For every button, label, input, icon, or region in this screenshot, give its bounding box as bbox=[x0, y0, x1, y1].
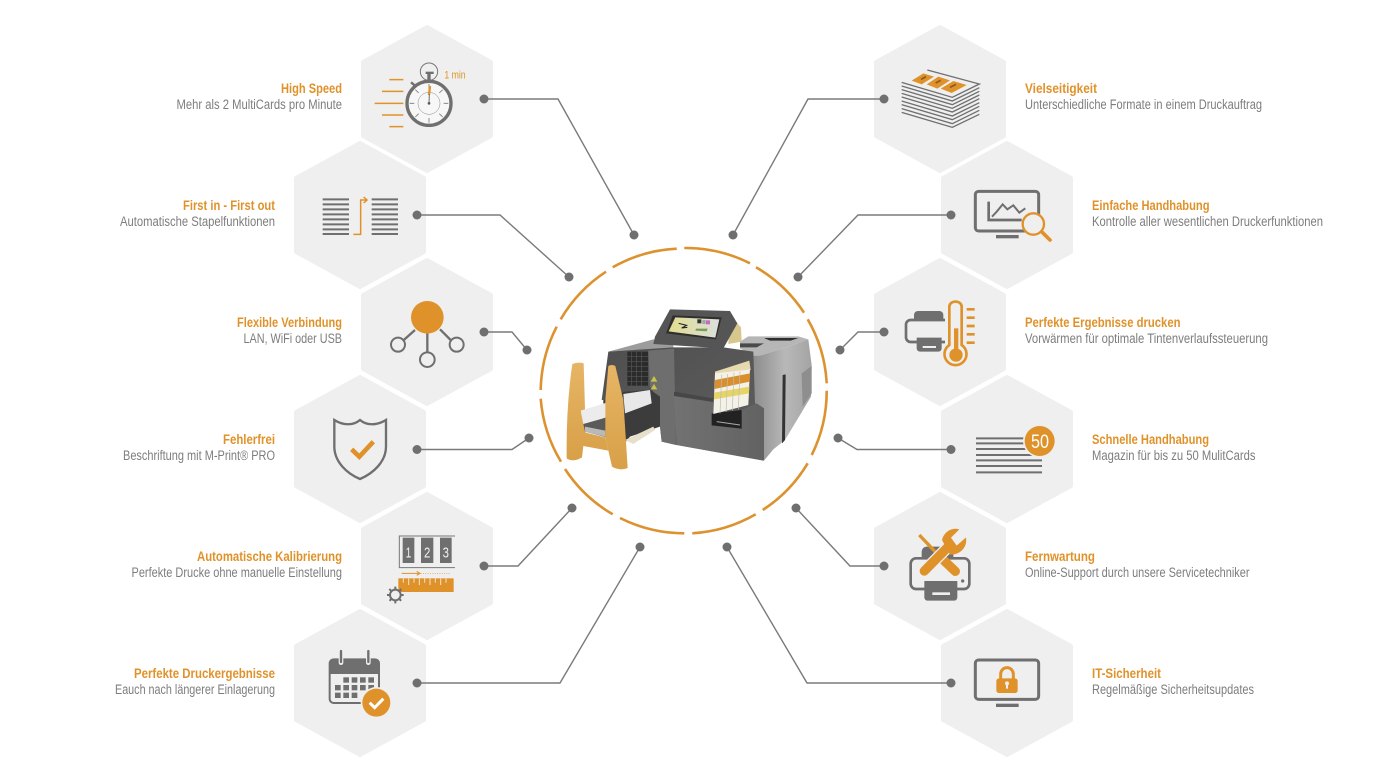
panel: Perfekte Ergebnisse drucken bbox=[836, 260, 1268, 404]
description: Unterschiedliche Formate in einem Druckauftrag bbox=[1025, 97, 1262, 112]
description: LAN, WiFi oder USB bbox=[244, 331, 342, 346]
heading: IT-Sicherheit bbox=[1092, 666, 1161, 681]
printer illustration bbox=[567, 309, 812, 469]
icon: calendar bbox=[330, 651, 392, 718]
icon: stopwatch: 1 min bbox=[444, 70, 466, 82]
icon: monitor with magnifier bbox=[975, 191, 1050, 240]
hexagon bbox=[363, 27, 491, 171]
description: Vorwärmen für optimale Tintenverlaufssteuerung bbox=[1025, 331, 1268, 346]
icon: shield bbox=[334, 420, 386, 479]
description: Beschriftung mit M-Print® PRO bbox=[123, 448, 275, 463]
description: Kontrolle aller wesentlichen Druckerfunktionen bbox=[1092, 214, 1323, 229]
icon: monitor with lock bbox=[975, 660, 1039, 707]
connector bbox=[480, 504, 576, 570]
hexagon bbox=[876, 260, 1004, 404]
connector bbox=[722, 542, 956, 688]
heading: First in - First out bbox=[183, 198, 275, 213]
panel: Automatische Kalibrierung bbox=[132, 494, 576, 638]
hexagon bbox=[943, 377, 1071, 521]
connector bbox=[834, 434, 956, 454]
icon: printer with thermometer bbox=[906, 302, 975, 365]
description: Mehr als 2 MultiCards pro Minute bbox=[176, 97, 342, 112]
icon: paper stack bbox=[902, 70, 979, 127]
connector bbox=[412, 434, 534, 454]
hexagon bbox=[363, 260, 491, 404]
heading: Einfache Handhabung bbox=[1092, 198, 1210, 213]
heading: Perfekte Druckergebnisse bbox=[134, 666, 275, 681]
icon: calibration bbox=[387, 536, 455, 603]
heading: Automatische Kalibrierung bbox=[197, 549, 342, 564]
hexagon bbox=[876, 27, 1004, 171]
description: Perfekte Drucke ohne manuelle Einstellung bbox=[132, 565, 342, 580]
icon: calibration: 2 bbox=[424, 545, 430, 561]
heading: Schnelle Handhabung bbox=[1092, 432, 1209, 447]
connector bbox=[792, 504, 888, 570]
connector bbox=[728, 94, 888, 240]
heading: Vielseitigkeit bbox=[1025, 81, 1097, 96]
hexagon bbox=[296, 611, 424, 755]
icon: stack with 50 badge: 50 bbox=[1031, 432, 1049, 453]
icon: calibration: 3 bbox=[443, 545, 449, 561]
heading: Perfekte Ergebnisse drucken bbox=[1025, 315, 1180, 330]
icon: printer with tools bbox=[911, 529, 969, 601]
hexagon bbox=[363, 494, 491, 638]
hexagon bbox=[876, 494, 1004, 638]
connector bbox=[480, 94, 638, 240]
panel: Perfekte Druckergebnisse bbox=[115, 542, 644, 755]
heading: High Speed bbox=[281, 81, 342, 96]
description: Eauch nach längerer Einlagerung bbox=[115, 682, 275, 697]
description: Automatische Stapelfunktionen bbox=[120, 214, 275, 229]
description: Magazin für bis zu 50 MulitCards bbox=[1092, 448, 1256, 463]
panel: Vielseitigkeit bbox=[728, 27, 1262, 240]
icon: calibration: 1 bbox=[406, 545, 411, 561]
connector bbox=[480, 328, 532, 354]
panel: Fehlerfrei bbox=[123, 377, 534, 521]
connector bbox=[794, 210, 956, 282]
heading: Fernwartung bbox=[1025, 549, 1095, 564]
hexagon bbox=[943, 143, 1071, 287]
heading: Fehlerfrei bbox=[223, 432, 275, 447]
description: Online-Support durch unsere Servicetechniker bbox=[1025, 565, 1250, 580]
panel: Schnelle Handhabung bbox=[834, 377, 1256, 521]
hexagon bbox=[296, 377, 424, 521]
icon: stack with 50 badge bbox=[976, 424, 1056, 472]
panel: Flexible Verbindung bbox=[237, 260, 532, 404]
connector bbox=[412, 542, 644, 688]
icon: stopwatch bbox=[375, 63, 466, 127]
icon: network bbox=[391, 301, 464, 367]
panel: First in - First out bbox=[120, 143, 574, 287]
connector bbox=[412, 210, 574, 282]
hexagon bbox=[296, 143, 424, 287]
panel: Einfache Handhabung bbox=[794, 143, 1323, 287]
heading: Flexible Verbindung bbox=[237, 315, 342, 330]
panel: IT-Sicherheit bbox=[722, 542, 1254, 755]
icon: stacks with arrow bbox=[323, 197, 398, 234]
description: Regelmäßige Sicherheitsupdates bbox=[1092, 682, 1254, 697]
dashed ring around printer bbox=[541, 248, 827, 533]
hexagon bbox=[943, 611, 1071, 755]
connector bbox=[836, 328, 888, 354]
panel: High Speed bbox=[176, 27, 638, 240]
panel: Fernwartung bbox=[792, 494, 1250, 638]
